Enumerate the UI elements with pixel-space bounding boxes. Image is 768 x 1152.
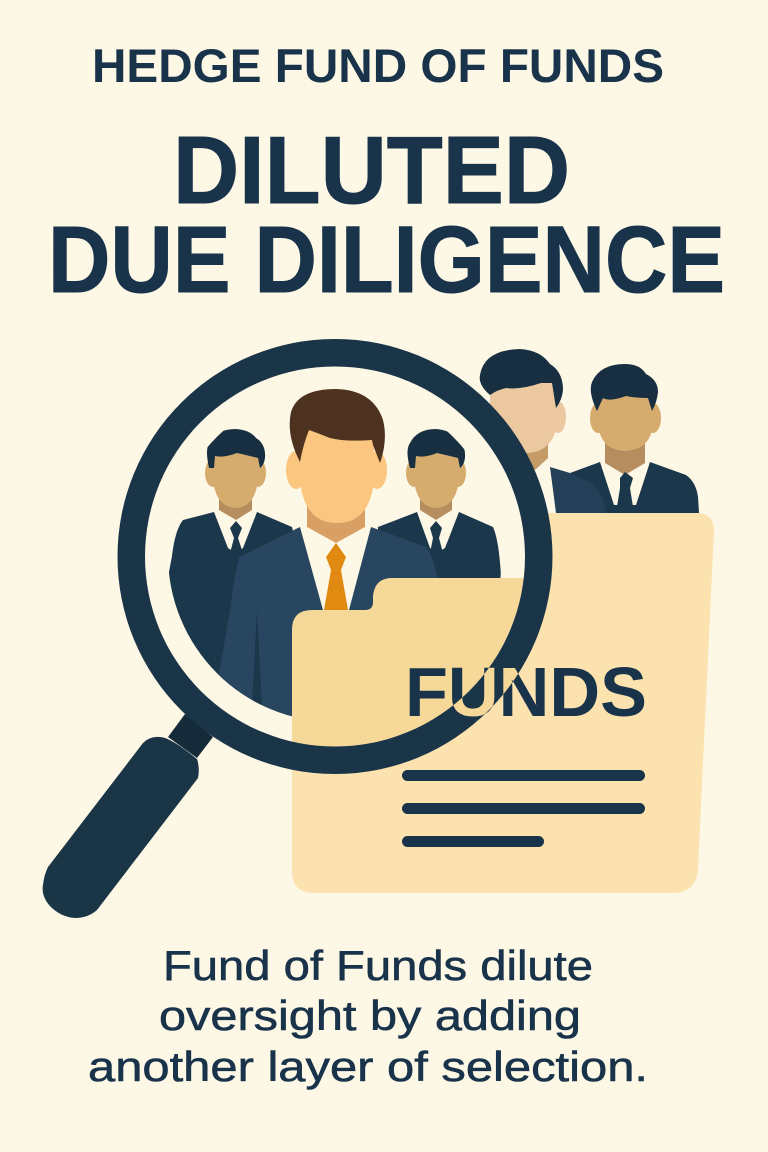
magnifier ring <box>118 339 552 774</box>
lens people group <box>169 389 501 716</box>
figure: lens centre businessman <box>218 389 437 716</box>
caption: oversight by adding <box>159 992 581 1039</box>
title: diluted due diligence <box>48 117 725 313</box>
necktie <box>324 543 348 610</box>
folder: part seen through lens <box>292 578 524 746</box>
figure: back businessman behind lens <box>480 349 606 513</box>
folder label: funds: FUNDS <box>405 653 647 731</box>
magnifier neck <box>168 714 213 758</box>
magnifier handle <box>43 737 199 918</box>
figure: lens left businessman <box>169 429 293 716</box>
folder: back panel <box>292 513 714 893</box>
caption: another layer of selection. <box>88 1043 648 1090</box>
folder text lines <box>402 770 645 847</box>
heading: hedge fund of funds: HEDGE FUND OF FUNDS <box>92 39 664 92</box>
magnifying glass <box>43 339 552 918</box>
figure: back right businessman <box>570 364 699 513</box>
title: diluted due diligence: DILUTED <box>173 117 570 224</box>
folder label overlap on ring: FUNDS <box>405 653 647 731</box>
caption <box>88 942 648 1090</box>
magnifier lens view <box>169 389 525 746</box>
caption: Fund of Funds dilute <box>163 942 593 989</box>
figure: lens right businessman <box>378 429 501 578</box>
